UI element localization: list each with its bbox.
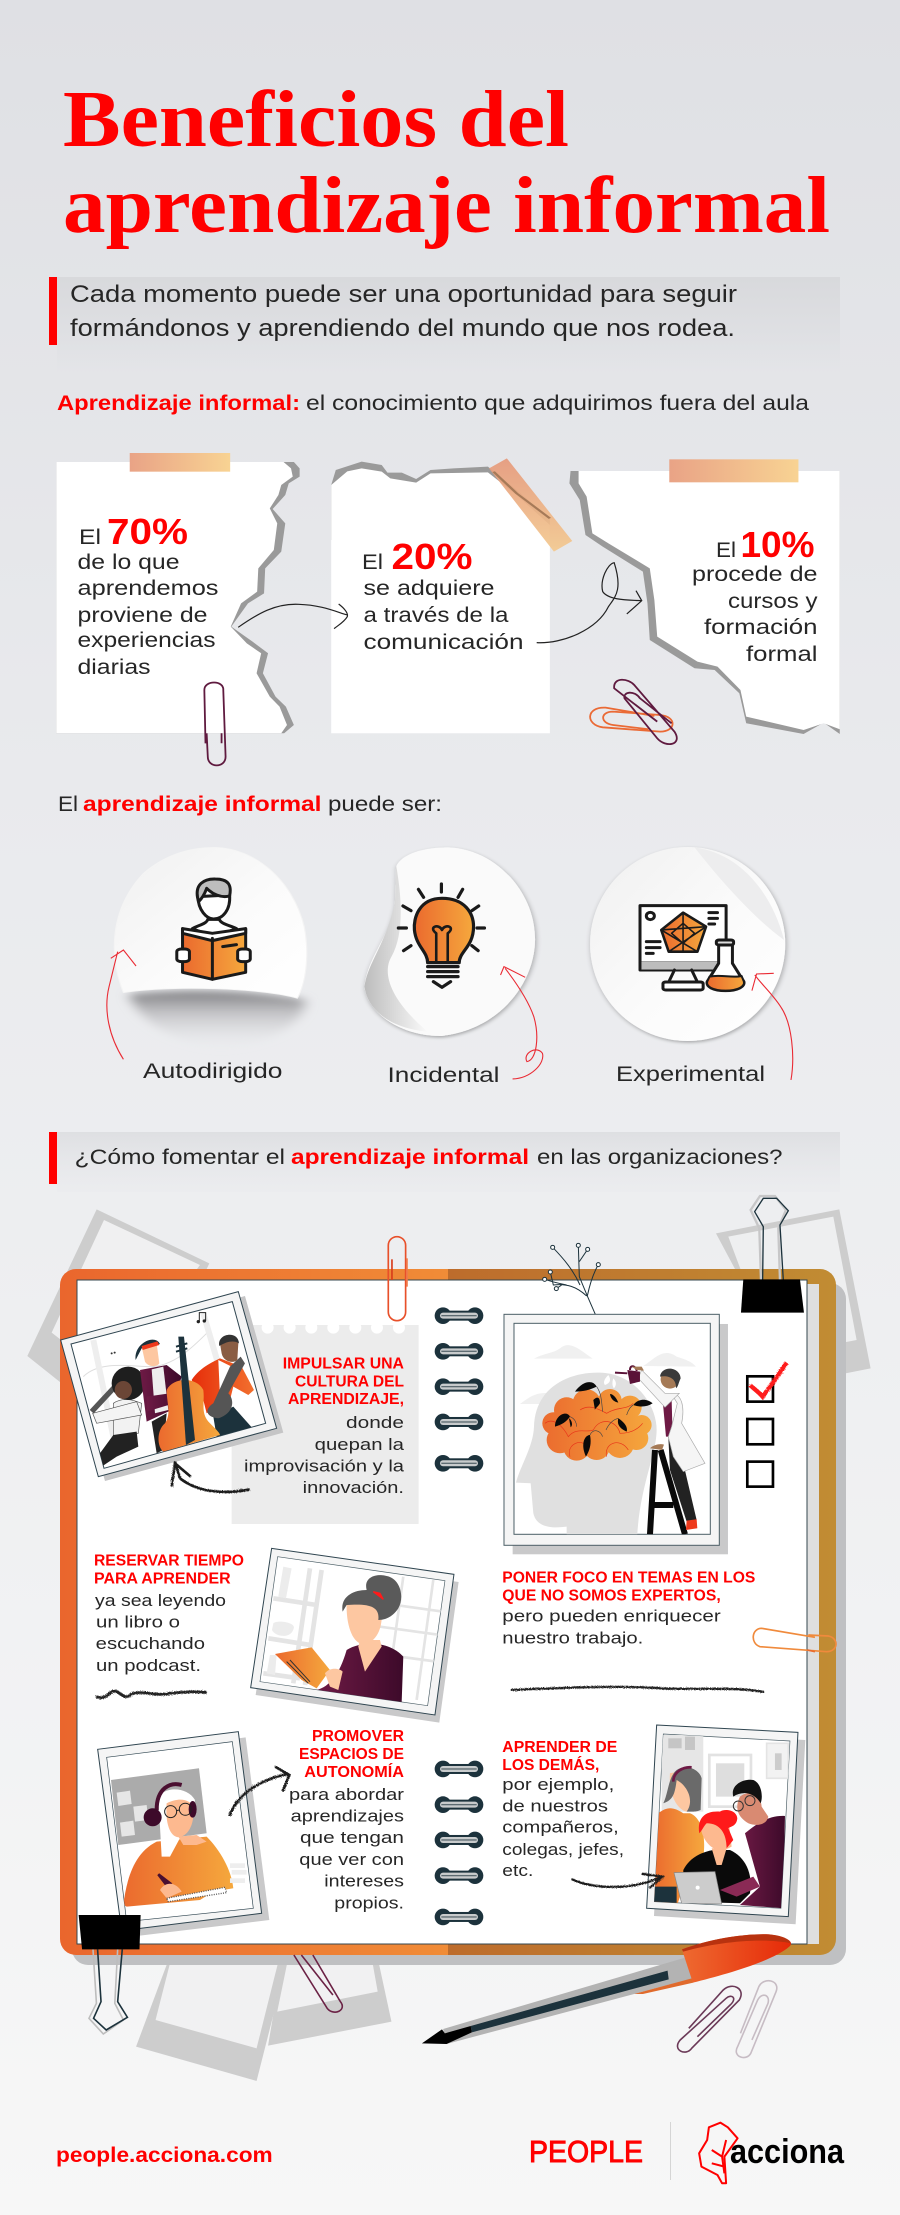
text: autonomy spaces: para abordar bbox=[289, 1785, 404, 1804]
panel: 70% torn paper: proviene de bbox=[78, 604, 208, 627]
definition heading bbox=[57, 392, 809, 415]
text: focus topics: nuestro trabajo. bbox=[502, 1628, 643, 1647]
panel: 10% torn paper bbox=[569, 459, 840, 734]
panel: 10% torn paper: cursos y bbox=[728, 590, 818, 613]
text: autonomy spaces: ESPACIOS DE bbox=[299, 1746, 404, 1763]
checklist bbox=[747, 1363, 787, 1487]
panel: 70% torn paper: diarias bbox=[78, 656, 150, 679]
text: reserve time: un libro o bbox=[96, 1613, 180, 1632]
text: reserve time: RESERVAR TIEMPO bbox=[94, 1553, 244, 1570]
text: culture of learning: improvisación y la bbox=[244, 1457, 405, 1476]
photo: music band bbox=[61, 1292, 283, 1481]
text: focus topics: QUE NO SOMOS EXPERTOS, bbox=[502, 1587, 721, 1604]
panel: 70% torn paper bbox=[56, 453, 300, 733]
text: autonomy spaces: PROMOVER bbox=[312, 1728, 404, 1745]
label: experimental: Experimental bbox=[616, 1063, 765, 1086]
text: learn from others: etc. bbox=[502, 1861, 533, 1880]
definition heading: Aprendizaje informal: bbox=[57, 392, 300, 415]
red check mark bbox=[750, 1363, 787, 1397]
notebook bbox=[60, 1269, 846, 1965]
arrow: brush to colleagues bbox=[572, 1874, 663, 1888]
text: culture of learning: donde bbox=[346, 1413, 404, 1432]
panel: 10% torn paper: procede de bbox=[692, 563, 818, 586]
label: autodirigido: Autodirigido bbox=[143, 1060, 282, 1083]
panel: 70% torn paper: aprendemos bbox=[78, 577, 218, 600]
footer divider bbox=[670, 2122, 671, 2180]
subheading: types bbox=[58, 793, 442, 816]
text: reserve time: PARA APRENDER bbox=[94, 1571, 231, 1588]
back polaroid: top left bbox=[27, 1209, 209, 1403]
text: autonomy spaces: AUTONOMÍA bbox=[304, 1762, 404, 1781]
arrow: experimental bbox=[752, 973, 793, 1080]
note box bbox=[232, 1322, 419, 1524]
binder clip: bottom left bbox=[79, 1915, 141, 2034]
intro callout bbox=[49, 277, 840, 372]
spiral rings: bottom bbox=[435, 1761, 483, 1925]
photo: brain gardening bbox=[504, 1314, 728, 1554]
subheading: types: puede ser: bbox=[328, 793, 442, 816]
text: autonomy spaces: propios. bbox=[334, 1893, 404, 1912]
text: focus topics: pero pueden enriquecer bbox=[502, 1607, 721, 1626]
photo: woman with headphones bbox=[98, 1732, 269, 1937]
text: autonomy spaces: intereses bbox=[324, 1872, 404, 1891]
intro callout: formándonos y aprendiendo del mundo que nos rodea. bbox=[70, 315, 735, 342]
title: aprendizaje informal bbox=[63, 162, 830, 250]
text: reserve time: ya sea leyendo bbox=[95, 1591, 226, 1610]
paperclip: right side bbox=[753, 1628, 836, 1652]
icon: reading person bbox=[177, 879, 250, 979]
arrow: 20% to 10% bbox=[537, 563, 642, 643]
text: culture of learning: IMPULSAR UNA bbox=[283, 1356, 404, 1373]
panel: 70% torn paper: experiencias bbox=[78, 629, 216, 652]
sticker: experimental bbox=[590, 847, 785, 1041]
text: culture of learning: CULTURA DEL bbox=[295, 1374, 404, 1391]
text: reserve time bbox=[94, 1553, 244, 1675]
panel: 20% torn paper bbox=[331, 458, 572, 733]
section heading: how to foster bbox=[49, 1132, 840, 1192]
arrow: brush to music photo bbox=[172, 1462, 250, 1492]
text: learn from others: APRENDER DE bbox=[502, 1739, 618, 1756]
definition heading: el conocimiento que adquirimos fuera del aula bbox=[306, 392, 809, 415]
footer url: people.acciona.com bbox=[56, 2144, 273, 2167]
text: autonomy spaces bbox=[289, 1728, 404, 1912]
back polaroid: top right bbox=[716, 1209, 871, 1385]
notebook cover left bbox=[60, 1269, 448, 1955]
title bbox=[63, 76, 830, 250]
text: learn from others: por ejemplo, bbox=[502, 1775, 614, 1794]
section heading: how to foster: ¿Cómo fomentar el bbox=[75, 1146, 285, 1169]
panel: 20% torn paper: se adquiere bbox=[364, 577, 494, 600]
pen bbox=[422, 1934, 791, 2044]
binder clip: top right bbox=[741, 1196, 804, 1313]
subheading: types: aprendizaje informal bbox=[83, 793, 322, 816]
arrow: brush to promover bbox=[229, 1767, 289, 1816]
text: culture of learning bbox=[244, 1356, 405, 1497]
icon: monitor and flask bbox=[640, 906, 744, 991]
paperclips: bottom right bbox=[678, 1981, 777, 2058]
intro callout: Cada momento puede ser una oportunidad para seguir bbox=[70, 281, 737, 308]
photo: woman reading bbox=[251, 1548, 459, 1723]
photo: three colleagues bbox=[647, 1725, 805, 1924]
text: reserve time: escuchando bbox=[96, 1634, 205, 1653]
text: reserve time: un podcast. bbox=[96, 1656, 201, 1675]
panel: 20% torn paper: 20% bbox=[392, 536, 472, 577]
panel: 10% torn paper: 10% bbox=[740, 524, 814, 565]
page edge bbox=[800, 1284, 819, 1944]
panel: 70% torn paper: 70% bbox=[107, 511, 188, 552]
arrow: autodirigido bbox=[107, 950, 136, 1059]
paperclips: orange and maroon bbox=[590, 680, 677, 744]
sprig bbox=[543, 1243, 600, 1314]
text: learn from others bbox=[502, 1739, 624, 1880]
text: learn from others: colegas, jefes, bbox=[502, 1840, 624, 1859]
white page bbox=[77, 1280, 807, 1944]
footer: acciona logo bbox=[699, 2123, 845, 2183]
section heading: how to foster: aprendizaje informal bbox=[291, 1146, 529, 1169]
text: learn from others: de nuestros bbox=[502, 1797, 608, 1816]
sticker: incidental bbox=[364, 847, 535, 1036]
panel: 20% torn paper: El bbox=[362, 551, 383, 574]
panel: 70% torn paper: El bbox=[79, 526, 101, 549]
notebook cover right bbox=[448, 1269, 836, 1955]
text: culture of learning: innovación. bbox=[303, 1478, 404, 1497]
paperclip: maroon upright bbox=[204, 682, 226, 765]
arrow: 70% to 20% bbox=[238, 604, 347, 629]
subheading: types: El bbox=[58, 793, 78, 816]
panel: 20% torn paper: a través de la bbox=[364, 604, 509, 627]
panel: 20% torn paper: comunicación bbox=[364, 631, 524, 654]
brush underline: left bbox=[96, 1691, 207, 1698]
text: learn from others: compañeros, bbox=[502, 1818, 619, 1837]
notebook shadow bbox=[72, 1283, 846, 1965]
text: focus topics: PONER FOCO EN TEMAS EN LOS bbox=[502, 1569, 756, 1586]
panel: 10% torn paper: formación bbox=[704, 616, 818, 639]
paperclip: top orange bbox=[388, 1237, 407, 1321]
text: autonomy spaces: que ver con bbox=[299, 1850, 404, 1869]
icon: light bulb bbox=[398, 884, 484, 987]
panel: 10% torn paper: El bbox=[716, 539, 736, 562]
text: culture of learning: APRENDIZAJE, bbox=[288, 1391, 404, 1408]
text: focus topics bbox=[502, 1569, 756, 1647]
sticker: autodirigido bbox=[114, 847, 307, 1050]
text: autonomy spaces: aprendizajes bbox=[291, 1807, 404, 1826]
brush underline: right bbox=[511, 1687, 764, 1692]
arrow: incidental bbox=[501, 967, 543, 1079]
panel: 70% torn paper: de lo que bbox=[78, 551, 180, 574]
spiral rings: top bbox=[435, 1307, 483, 1472]
back polaroids: bottom left bbox=[136, 1950, 391, 2081]
text: culture of learning: quepan la bbox=[315, 1435, 405, 1454]
text: autonomy spaces: que tengan bbox=[300, 1828, 404, 1847]
title: Beneficios del bbox=[63, 76, 569, 164]
panel: 10% torn paper: formal bbox=[746, 643, 818, 666]
text: learn from others: LOS DEMÁS, bbox=[502, 1755, 599, 1774]
section heading: how to foster: en las organizaciones? bbox=[537, 1146, 782, 1169]
label: incidental: Incidental bbox=[388, 1064, 500, 1087]
footer: people wordmark: PEOPLE bbox=[529, 2134, 643, 2169]
footer: acciona logo: acciona bbox=[730, 2133, 845, 2171]
paperclip: bottom maroon bbox=[294, 1955, 342, 2012]
